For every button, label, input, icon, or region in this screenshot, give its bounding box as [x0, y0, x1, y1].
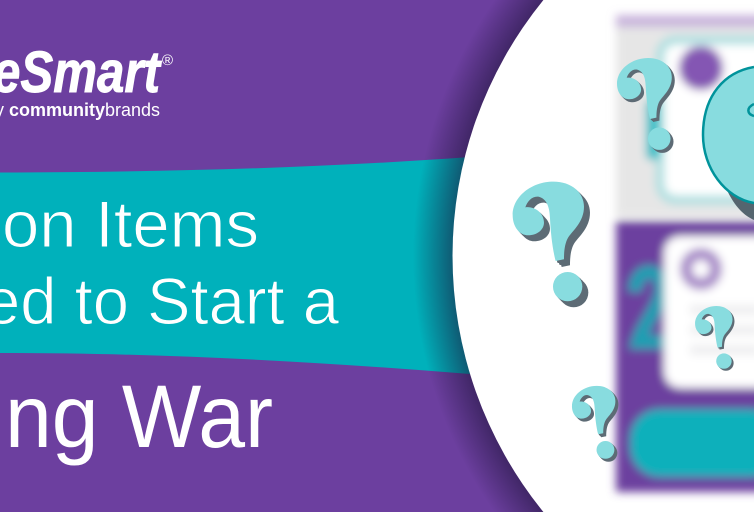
title line 3: ng War: [5, 366, 273, 466]
blurred infographic thumbnail: [616, 15, 754, 492]
large mark body: [703, 67, 754, 203]
icon: question mark top: [617, 58, 672, 150]
thumbnail numeral two: [635, 272, 668, 342]
icon: question mark small right: [695, 306, 732, 369]
icon: question mark bottom: [572, 386, 615, 459]
thumbnail top card: [660, 40, 754, 200]
thumbnail header strip: [616, 15, 754, 27]
white circle: [453, 0, 754, 512]
icon: large question mark partial: [703, 67, 754, 220]
teal banner: [0, 157, 470, 374]
thumbnail purple panel: [616, 221, 754, 492]
thumbnail lower icon: [686, 254, 716, 284]
thumbnail grey panel: [616, 27, 754, 217]
thumbnail lower card: [664, 236, 754, 388]
large mark hook: [748, 104, 754, 116]
large mark shadow: [726, 188, 754, 220]
thumbnail teal numeral: [646, 100, 660, 160]
title line 1: on Items: [2, 187, 259, 261]
icon: question mark left: [513, 182, 584, 301]
thumbnail top icon: [679, 46, 723, 90]
logo: [0, 40, 173, 120]
circle edge shadow: [380, 0, 580, 512]
thumbnail text lines: [690, 305, 754, 355]
large mark outline: [703, 67, 754, 203]
thumbnail teal pill: [630, 409, 754, 477]
logo registered mark: ®: [162, 52, 173, 69]
